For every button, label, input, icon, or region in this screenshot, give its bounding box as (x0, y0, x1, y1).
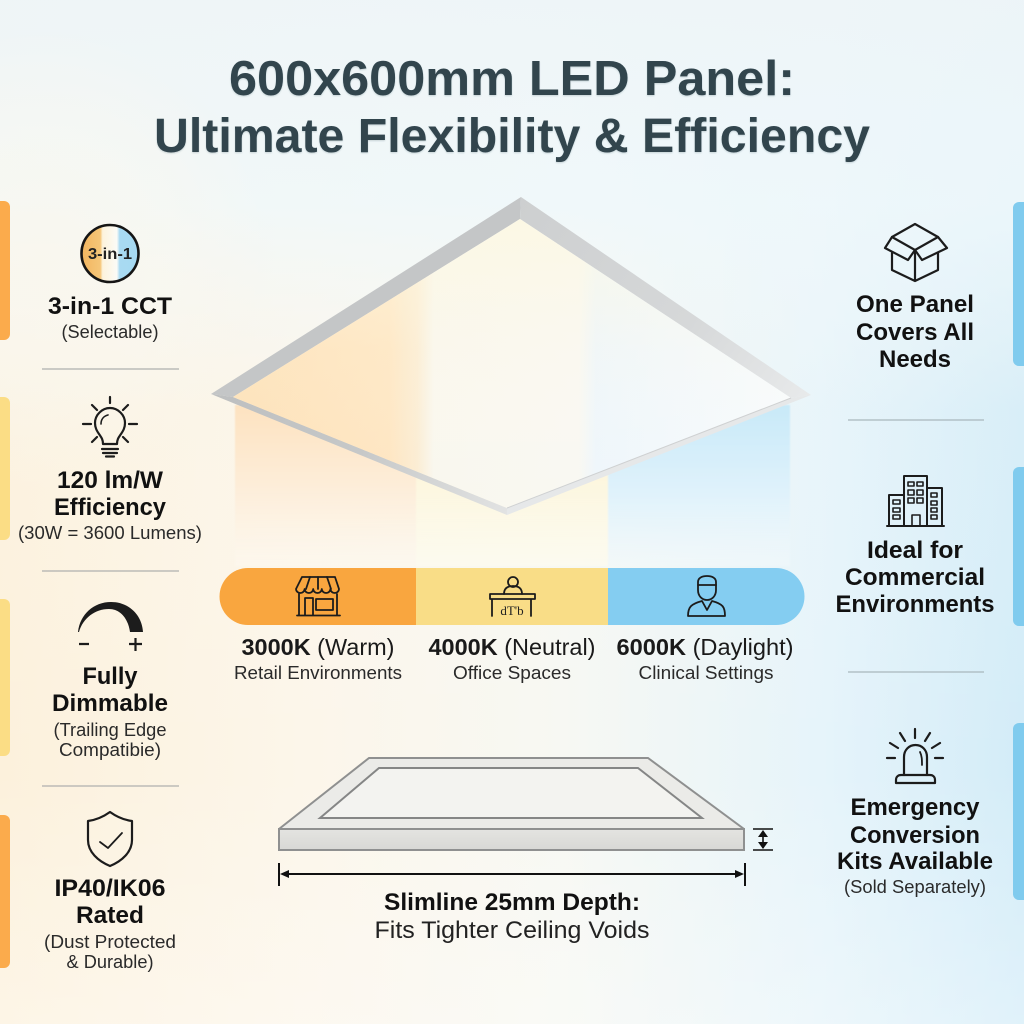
icon: beacon (887, 729, 943, 783)
feature: one panel (856, 224, 974, 373)
colour temperature labels: 3000K (Warm) (242, 634, 394, 660)
width dimension arrow (279, 863, 745, 886)
colour temperature labels: 4000K (Neutral) (428, 634, 596, 660)
frame: upper-left edge (211, 197, 521, 397)
feature: commercial (836, 476, 994, 618)
feature: commercial: Commercial (845, 564, 985, 591)
icon: dimmer arc (78, 602, 143, 651)
feature: 3-in-1 CCT: 3-in-1 CCT (48, 293, 172, 320)
main LED panel (211, 197, 811, 515)
frame: upper-right edge (520, 197, 811, 398)
feature: efficiency: (30W = 3600 Lumens) (18, 522, 202, 543)
feature: commercial: Environments (836, 591, 994, 618)
slim panel diagram (279, 758, 773, 886)
icon: office building (887, 476, 944, 526)
light beams under panel (235, 405, 790, 566)
feature: one panel: Needs (879, 346, 951, 373)
colour temperature labels: Office Spaces (453, 662, 571, 683)
title (154, 51, 870, 163)
slimline caption: Slimline 25mm Depth: (384, 889, 640, 916)
colour temperature labels (234, 634, 794, 683)
feature: efficiency: 120 lm/W (57, 467, 163, 494)
feature: one panel: Covers All (856, 319, 974, 346)
left dividers (42, 369, 179, 786)
frame: lower-left edge (211, 394, 507, 515)
right dividers (848, 420, 984, 672)
slimline caption (374, 889, 650, 944)
colour temperature labels: Clinical Settings (638, 662, 774, 683)
feature: dimmable: Dimmable (52, 690, 168, 717)
icon: 3-in-1 badge: 3-in-1 (88, 246, 132, 263)
icon: open box (885, 224, 947, 281)
feature: 3-in-1 CCT: (Selectable) (62, 321, 158, 342)
colour temperature labels: Retail Environments (234, 662, 402, 683)
icon: clinician (688, 576, 725, 616)
icon: desk: dT'b (500, 603, 524, 618)
feature: dimmable: (Trailing Edge (54, 719, 166, 740)
icon: shop (296, 577, 340, 616)
feature: emergency (837, 729, 993, 897)
feature: IP rating: Rated (76, 902, 144, 929)
feature: 3-in-1 CCT (48, 225, 172, 342)
lens (233, 219, 791, 508)
feature: IP rating: & Durable) (66, 951, 154, 972)
feature: efficiency: Efficiency (54, 494, 167, 521)
depth dimension arrow (753, 829, 773, 850)
icon: desk (490, 577, 535, 618)
frame: lower-right edge (507, 395, 811, 515)
feature: dimmable (52, 602, 168, 760)
side tabs: left (0, 201, 10, 968)
feature: one panel: One Panel (856, 291, 974, 318)
side tabs: right (1013, 202, 1024, 900)
colour temperature labels: 6000K (Daylight) (616, 634, 794, 660)
title: Ultimate Flexibility & Efficiency (154, 110, 870, 163)
feature: emergency: Emergency (850, 794, 980, 821)
feature: dimmable: Compatibie) (59, 739, 161, 760)
feature: emergency: (Sold Separately) (844, 876, 986, 897)
icon: shield (88, 812, 132, 866)
feature: commercial: Ideal for (867, 537, 963, 564)
feature: IP rating: IP40/IK06 (54, 875, 166, 902)
feature: IP rating (44, 812, 176, 972)
feature: emergency: Conversion (850, 822, 980, 849)
colour temperature bar (220, 568, 804, 625)
icon: light bulb (83, 397, 137, 456)
feature: IP rating: (Dust Protected (44, 931, 176, 952)
feature: dimmable: Fully (82, 663, 138, 690)
feature: emergency: Kits Available (837, 848, 993, 875)
title: 600x600mm LED Panel: (229, 51, 795, 106)
feature: efficiency (18, 397, 202, 543)
slimline caption: Fits Tighter Ceiling Voids (374, 917, 650, 944)
